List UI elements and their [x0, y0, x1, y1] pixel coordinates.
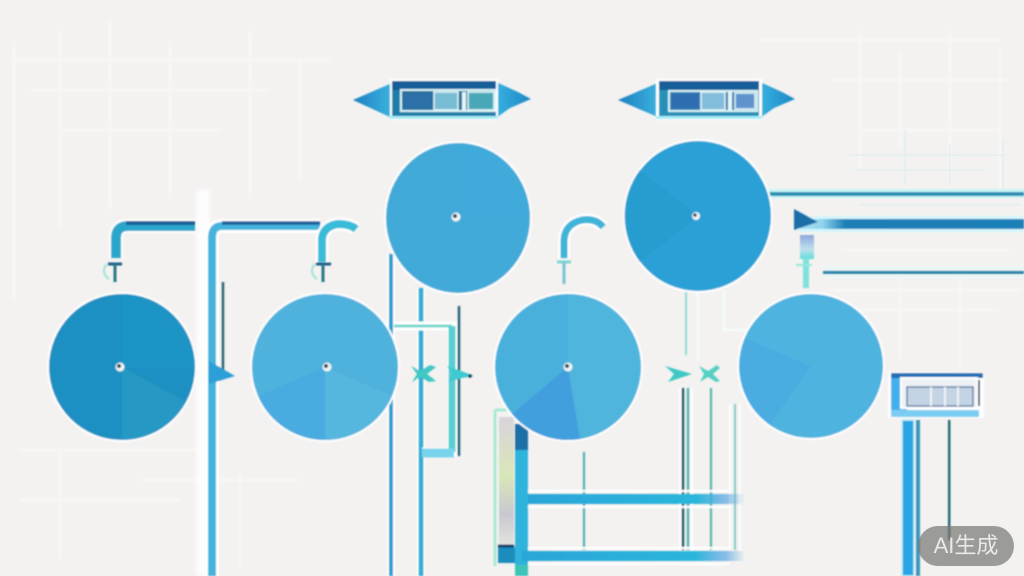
disc 3	[493, 292, 643, 442]
lower right tank	[888, 372, 984, 576]
faint right edge lines	[850, 130, 1020, 205]
disc 2	[250, 292, 400, 442]
badge: AI generated	[918, 526, 1014, 566]
lower left bracket	[495, 410, 744, 576]
top left valve icon	[353, 79, 531, 120]
badge: AI generated: AI生成	[934, 533, 998, 558]
right long pipes	[768, 189, 1024, 288]
lower vertical lines	[584, 388, 740, 550]
top disc 2	[623, 139, 773, 293]
centre hook pipe	[557, 220, 603, 284]
left pipes	[104, 223, 356, 576]
disc 1	[47, 292, 197, 442]
top disc 1	[384, 141, 532, 295]
vertical feed pipes	[391, 254, 790, 576]
top right valve icon	[618, 79, 795, 120]
teal valves	[411, 365, 720, 382]
disc 4	[737, 292, 885, 440]
